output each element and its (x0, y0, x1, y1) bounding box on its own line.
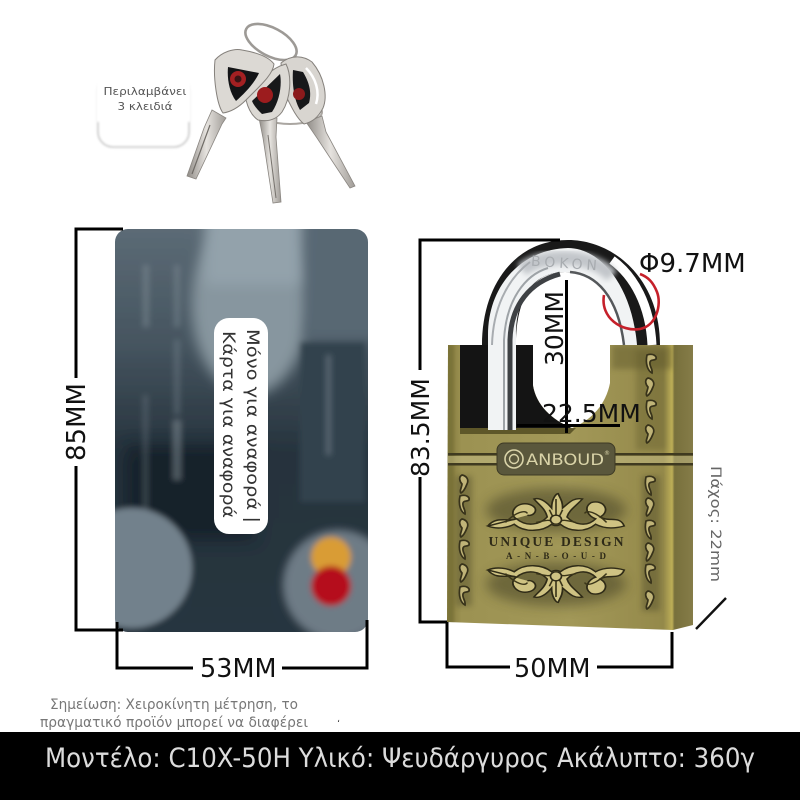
dimension: card width: 53MM (200, 654, 276, 684)
dimension: lock width: 50MM (514, 654, 590, 684)
dimension: shackle clearance height (540, 280, 569, 433)
label: keys included: Περιλαμβάνει (104, 85, 187, 98)
shackle (482, 240, 660, 430)
dimension: lock height: 83.5MM (406, 378, 435, 477)
dimension: shackle clearance height: 30MM (540, 291, 569, 366)
note pill (214, 318, 268, 534)
engraved side scrolls (459, 354, 656, 609)
callout: shackle diameter circle (604, 274, 659, 329)
key ring (240, 16, 302, 68)
dimension: lock width (447, 622, 672, 684)
shackle chrome (488, 248, 637, 430)
note: measurement disclaimer: ، (337, 715, 340, 725)
dimension: card height: 85MM (62, 383, 92, 461)
shackle dark outline (482, 240, 660, 345)
panel: reference card (115, 229, 368, 632)
blurred card artwork (115, 229, 368, 632)
label: keys included (96, 70, 191, 147)
label: keys included: 3 κλειδιά (118, 100, 172, 113)
brand plate (497, 443, 615, 475)
panel: reference card: Κάρτα για αναφορά (218, 331, 238, 518)
dimension: shackle clearance width: 22.5MM (542, 399, 641, 428)
shackle rear highlight (612, 260, 652, 345)
dimension: card width (117, 620, 367, 684)
engraved text (488, 534, 624, 561)
engraved ornament bottom (488, 566, 624, 602)
dimension: thickness: Πάχος: 22mm (707, 466, 723, 582)
dimension: card height (62, 229, 123, 630)
engraved text: UNIQUE DESIGN (488, 534, 624, 549)
dimension: thickness (696, 466, 726, 629)
lower ring (258, 100, 322, 124)
key: middle (246, 64, 290, 203)
key: right (281, 57, 355, 188)
dimension: lock height (406, 240, 560, 622)
shackle cutout (460, 345, 572, 428)
shackle: BOKON (531, 254, 597, 274)
brand plate: ANBOUD (526, 450, 604, 469)
footer bar: model, material, weight (0, 732, 800, 800)
lock body (447, 345, 693, 630)
icon: three keys on a ring (187, 16, 355, 203)
note: measurement disclaimer: Σημείωση: Χειροκίνητη μέτρηση, το (50, 697, 298, 713)
engraved text: A-N-B-O-U-D (506, 551, 606, 561)
panel: reference card: Μόνο για αναφορά | (242, 329, 262, 523)
note: measurement disclaimer (40, 697, 340, 731)
key: left (187, 49, 274, 179)
brand plate: ® (604, 450, 610, 457)
note: measurement disclaimer: πραγματικό προϊόν μπορεί να διαφέρει (40, 715, 308, 731)
dimension: shackle diameter: Φ9.7MM (639, 249, 746, 279)
panel: padlock (447, 240, 693, 630)
engraved ornament top (488, 494, 624, 530)
